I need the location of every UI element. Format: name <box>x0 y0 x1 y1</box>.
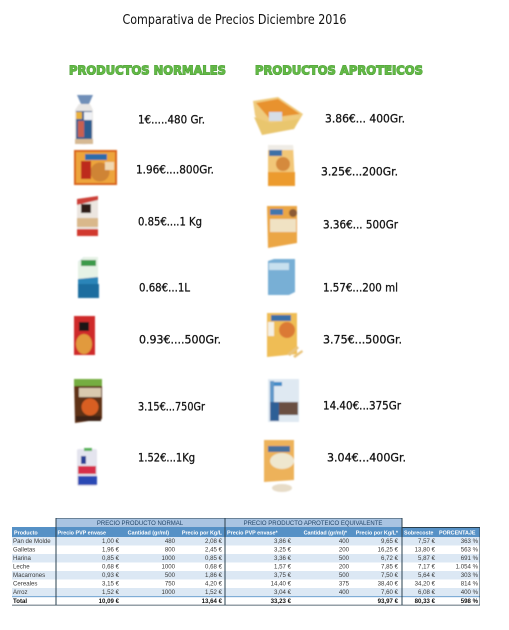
table row: pan de molde: 3,86 € <box>274 538 292 545</box>
table row: galletas: 1,96 € <box>102 546 120 554</box>
table column headers <box>14 530 476 536</box>
table row: leche: 200 <box>339 564 350 570</box>
table row: galletas: 13,80 € <box>415 546 436 554</box>
table row: pan de molde: 400 <box>339 538 350 545</box>
table row: harina: 1000 <box>161 555 176 562</box>
table row: leche: 1,57 € <box>274 564 292 570</box>
icon: low protein cereal box <box>268 379 299 422</box>
table row: arroz: 1,52 € <box>205 589 223 596</box>
table column headers: Precio por Kg/L* <box>356 530 399 536</box>
table row: harina: Harina <box>13 555 32 562</box>
icon: pasta package <box>74 316 95 355</box>
table row: arroz: 6,08 € <box>418 589 436 596</box>
title: Comparativa de Precios Diciembre 2016 <box>122 12 346 28</box>
price: pan aproteico: 3.86€... 400Gr. <box>325 112 405 126</box>
price: harina aproteica: 3.36€... 500Gr <box>323 218 398 232</box>
table row: macarrones: 7,50 € <box>381 572 399 579</box>
price: leche normal: 0.68€...1L <box>139 280 191 294</box>
price: harina normal: 0.85€....1 Kg <box>138 214 202 228</box>
table row: harina: 6,72 € <box>381 555 399 562</box>
table row: harina: 500 <box>339 555 350 562</box>
table row: leche: 1000 <box>161 564 176 570</box>
table row: pan de molde: 1,00 € <box>102 538 120 545</box>
icon: low protein milk box <box>268 259 295 295</box>
table row: galletas: 563 % <box>461 546 479 554</box>
table row: leche: 7,17 € <box>418 564 436 570</box>
table row: pan de molde: 2,08 € <box>205 538 223 545</box>
table group headings <box>97 521 382 527</box>
price: arroz normal: 1.52€...1Kg <box>138 450 195 464</box>
table row: harina: 3,36 € <box>274 555 292 562</box>
table row: harina <box>13 555 479 562</box>
table row: galletas: 16,25 € <box>378 546 399 554</box>
table row: macarrones: 1,86 € <box>205 572 223 579</box>
table row: total: 598 % <box>461 598 479 605</box>
price: cereales aproteicos: 14.40€...375Gr <box>323 398 401 412</box>
heading: productos normales: PRODUCTOS NORMALES <box>69 62 226 78</box>
table column headers: Producto <box>14 530 38 536</box>
table row: pan de molde: 480 <box>165 538 176 545</box>
table row: macarrones <box>13 572 479 579</box>
table row: galletas: Galletas <box>13 546 35 554</box>
table row: leche: Leche <box>13 564 30 570</box>
icon: low protein flour box <box>267 206 297 248</box>
table column headers: Sobrecoste <box>404 530 433 536</box>
table row: galletas: 2,45 € <box>205 546 223 554</box>
table row: total <box>13 598 479 605</box>
table row: galletas: 200 <box>339 546 350 554</box>
icon: low protein bread tray <box>253 97 303 135</box>
table row: total: Total <box>13 598 27 605</box>
icon: cereal box <box>74 379 102 423</box>
table row: arroz: Arroz <box>13 589 28 596</box>
table row: arroz: 1,52 € <box>102 589 120 596</box>
icon: low protein pasta box <box>267 313 303 358</box>
table row: arroz <box>13 589 479 596</box>
icon: rice package <box>77 448 97 486</box>
icon: bread bag <box>75 95 93 144</box>
table row: cereales: 814 % <box>461 580 479 588</box>
table row: arroz: 400 <box>339 589 350 596</box>
table row: cereales: 4,20 € <box>205 580 223 588</box>
table row: cereales: 3,15 € <box>102 580 120 588</box>
table row: cereales: Cereales <box>13 580 37 588</box>
table row: pan de molde: 9,65 € <box>381 538 399 545</box>
table row: cereales: 38,40 € <box>378 580 399 588</box>
price: macarrones normal: 0.93€....500Gr. <box>139 332 221 346</box>
table column headers: PORCENTAJE <box>439 530 476 536</box>
price: leche aproteica: 1.57€...200 ml <box>323 280 398 294</box>
price comparison table <box>12 518 480 605</box>
price: galletas normal: 1.96€....800Gr. <box>136 162 214 176</box>
table row: harina: 0,85 € <box>102 555 120 562</box>
table column headers: Precio PVP envase* <box>227 530 278 536</box>
table group headings: PRECIO PRODUCTO APROTEICO EQUIVALENTE <box>244 521 382 527</box>
table row: macarrones: Macarrones <box>13 572 45 579</box>
table row: total: 93,97 € <box>378 598 399 605</box>
table row: total: 10,09 € <box>99 598 120 605</box>
table row: cereales <box>13 580 479 588</box>
price: galletas aproteicas: 3.25€...200Gr. <box>321 164 398 178</box>
table row: cereales: 34,20 € <box>415 580 436 588</box>
table row: cereales: 14,40 € <box>271 580 292 588</box>
table column headers: Cantidad (gr/ml) <box>128 530 169 536</box>
table row: total: 13,64 € <box>202 598 223 605</box>
table row: arroz: 400 % <box>461 589 479 596</box>
table row: pan de molde <box>13 538 479 545</box>
icon: flour bag <box>77 196 98 236</box>
table row: leche: 0,68 € <box>205 564 223 570</box>
table row: macarrones: 500 <box>165 572 176 579</box>
table row: macarrones: 303 % <box>461 572 479 579</box>
table row: galletas: 3,25 € <box>274 546 292 554</box>
table row: leche: 7,85 € <box>381 564 399 570</box>
table row: total: 80,33 € <box>415 598 436 605</box>
table row: arroz: 7,60 € <box>381 589 399 596</box>
table row: cereales: 375 <box>339 580 350 588</box>
heading: productos aproteicos: PRODUCTOS APROTEICOS <box>255 62 423 78</box>
icon: low protein rice box <box>264 440 294 492</box>
table row: pan de molde: Pan de Molde <box>13 538 51 545</box>
icon: low protein cookie bag <box>268 145 295 186</box>
table row: galletas <box>13 546 479 554</box>
table row: cereales: 750 <box>165 580 176 588</box>
table row: pan de molde: 363 % <box>461 538 479 545</box>
table row: pan de molde: 7,57 € <box>418 538 436 545</box>
icon: cookie box <box>74 150 117 185</box>
price: pan normal: 1€.....480 Gr. <box>138 112 205 126</box>
price: cereales normal: 3.15€...750Gr <box>138 400 205 414</box>
table group headings: PRECIO PRODUCTO NORMAL <box>97 521 184 527</box>
icon: milk carton <box>78 257 99 298</box>
table column headers: Precio por Kg/L <box>182 530 223 536</box>
table row: macarrones: 500 <box>339 572 350 579</box>
table row: total: 33,23 € <box>271 598 292 605</box>
table row: harina: 0,85 € <box>205 555 223 562</box>
table row: harina: 691 % <box>461 555 479 562</box>
table row: galletas: 800 <box>165 546 176 554</box>
table row: leche: 0,68 € <box>102 564 120 570</box>
price: macarrones aproteicos: 3.75€...500Gr. <box>323 332 402 346</box>
price: arroz aproteico: 3.04€...400Gr. <box>327 450 406 464</box>
table row: leche <box>13 564 479 570</box>
table row: leche: 1.054 % <box>456 564 479 570</box>
table row: macarrones: 5,64 € <box>418 572 436 579</box>
table row: arroz: 3,04 € <box>274 589 292 596</box>
table column headers: Cantidad (gr/ml)* <box>304 530 348 536</box>
table column headers: Precio PVP envase <box>58 530 106 536</box>
table row: macarrones: 3,75 € <box>274 572 292 579</box>
table row: macarrones: 0,93 € <box>102 572 120 579</box>
table row: harina: 5,87 € <box>418 555 436 562</box>
table row: arroz: 1000 <box>161 589 176 596</box>
